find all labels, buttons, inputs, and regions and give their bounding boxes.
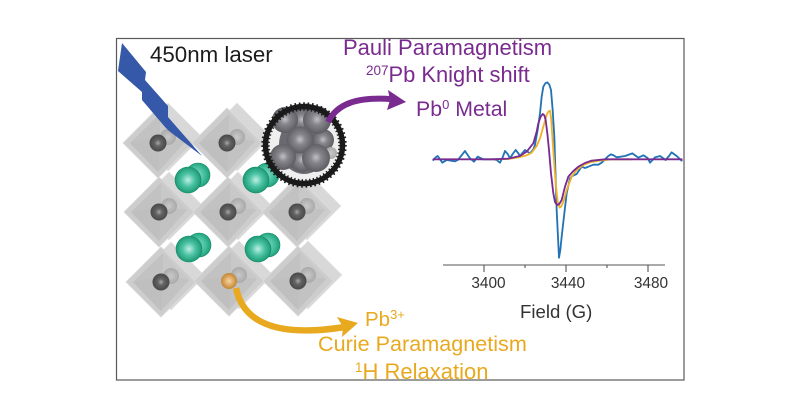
purple text block: Pauli Paramagnetism: [343, 35, 552, 60]
orange text block: Curie Paramagnetism: [318, 331, 527, 356]
arrow: to Pauli paramagnetism: [328, 90, 406, 122]
purple text block: Pb: [416, 97, 442, 121]
frame: [116, 38, 684, 380]
axis tick labels: 3440: [551, 275, 585, 292]
icon: laser lightning bolt: [118, 43, 202, 156]
label: laser: 450nm laser: [150, 42, 273, 67]
orange text block: Pb: [365, 308, 390, 331]
x axis: [443, 265, 665, 272]
purple text block: Pb Knight shift: [389, 62, 530, 87]
axis tick labels: 3480: [634, 275, 668, 292]
Pb metal nanocluster: [266, 106, 342, 184]
arrow: to Curie paramagnetism: [236, 288, 358, 337]
spectrum curves: [433, 82, 682, 258]
orange text block: [318, 307, 527, 384]
teal cation spheres: [175, 163, 280, 262]
orange text block: H Relaxation: [363, 359, 488, 384]
orange text block: 3+: [390, 307, 405, 322]
orange text block: 1: [355, 360, 363, 375]
purple text block: [343, 35, 552, 121]
purple text block: Metal: [449, 97, 507, 121]
purple text block: 207: [366, 63, 389, 78]
purple text block: 0: [442, 97, 449, 112]
axis title: Field (G): [520, 301, 592, 322]
EPR spectrum chart: [433, 82, 682, 322]
axis tick labels: [471, 275, 668, 292]
Pb3+ orange atom: [221, 267, 247, 289]
perovskite lattice of octahedra: [123, 103, 342, 317]
axis tick labels: 3400: [471, 275, 506, 292]
